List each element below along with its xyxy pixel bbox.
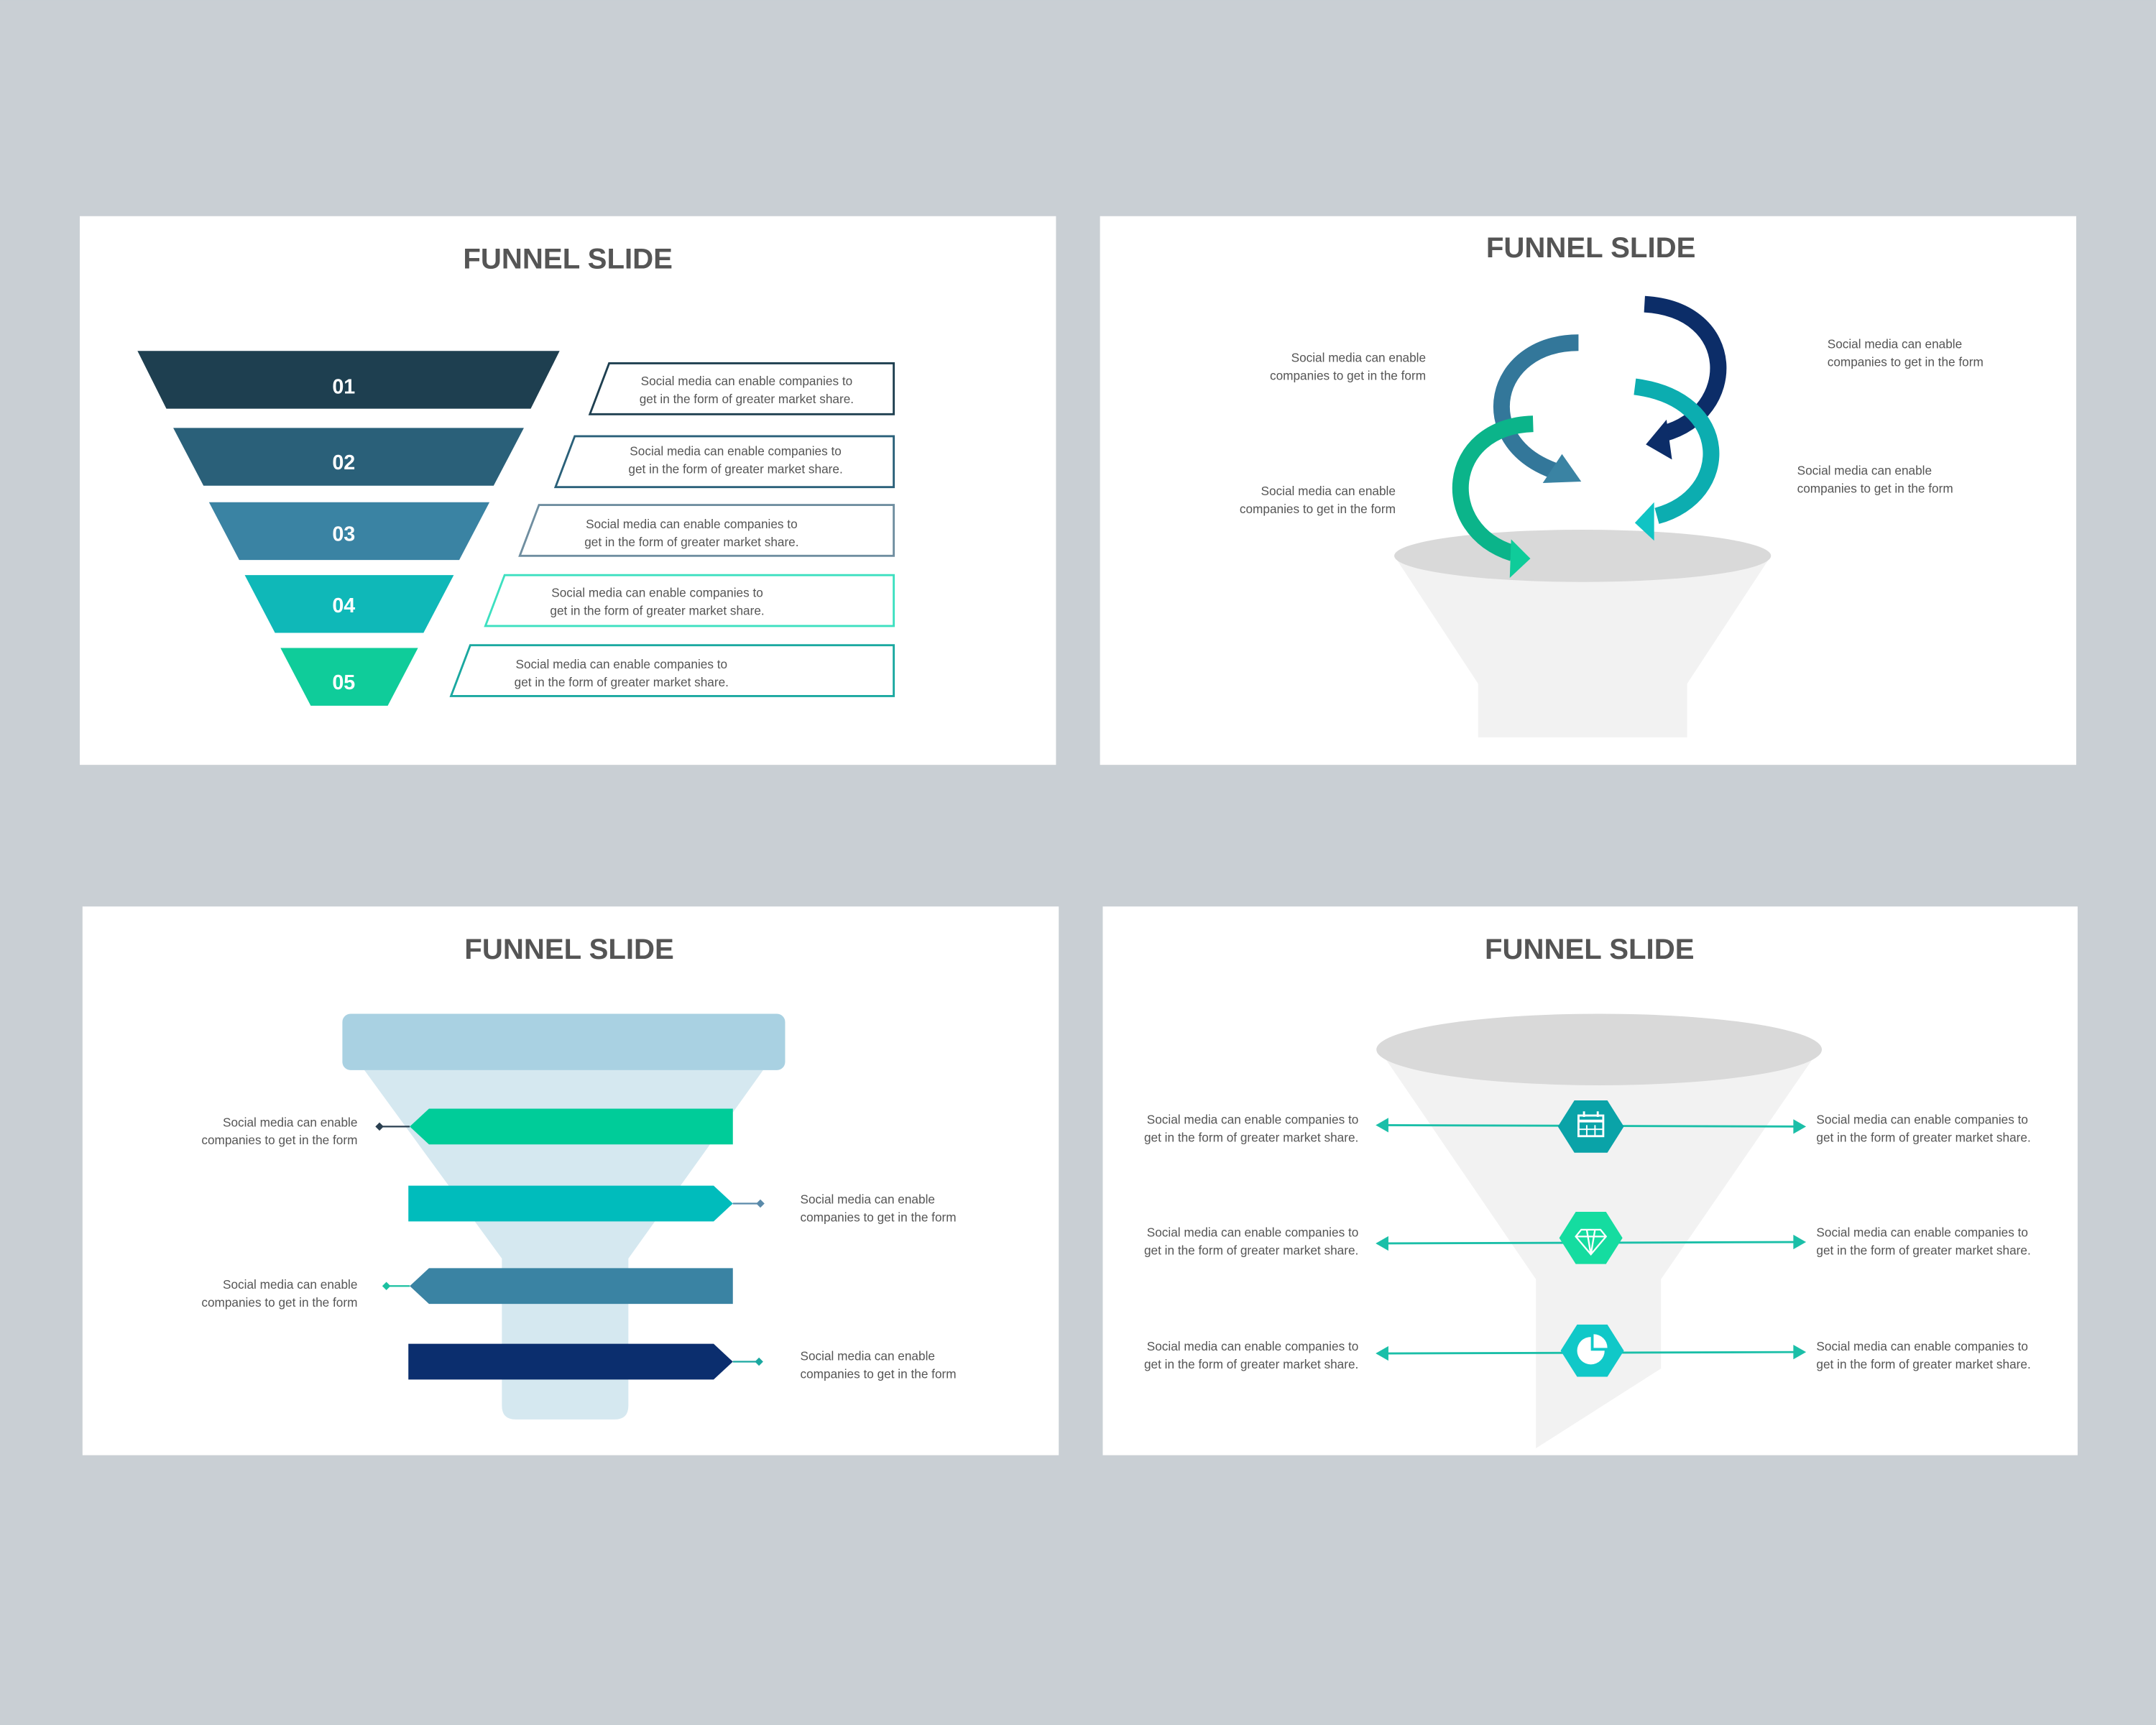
text: left 3: Social media can enable [223, 1277, 357, 1292]
icon: calendar hexagon [1558, 1100, 1624, 1153]
text box 1 [590, 363, 894, 414]
text: right 2: Social media can enable companies to [1816, 1225, 2028, 1239]
funnel layer 01: 01 [332, 376, 355, 399]
text: right 3: get in the form of greater market share. [1816, 1357, 2031, 1371]
text: right 4 [801, 1349, 957, 1381]
text box 4 [485, 575, 894, 626]
text: left 1: get in the form of greater market share. [1144, 1130, 1358, 1144]
funnel layer 03 [209, 502, 489, 560]
text: right top: companies to get in the form [1828, 354, 1984, 369]
text: left 1 [1144, 1113, 1358, 1144]
text: left 1: Social media can enable companies to [1147, 1113, 1358, 1127]
text: right 2 [1816, 1225, 2031, 1257]
bar 2 [408, 1186, 765, 1221]
icon: diamond hexagon [1560, 1212, 1623, 1264]
funnel layer 04 [245, 575, 453, 632]
funnel body [1394, 530, 1771, 737]
text box 2 [556, 436, 894, 487]
text: right 3 [1816, 1339, 2031, 1371]
text: right 2: get in the form of greater market share. [1816, 1243, 2031, 1257]
text: left 2 [1144, 1225, 1358, 1257]
text box 1: get in the form of greater market share. [640, 392, 854, 406]
text box 2: Social media can enable companies to [630, 444, 842, 459]
text: right 1: get in the form of greater market share. [1816, 1130, 2031, 1144]
text: left top [1270, 351, 1426, 382]
text: right top [1828, 336, 1984, 369]
title: FUNNEL SLIDE [1485, 933, 1695, 965]
icon: pie chart hexagon [1561, 1325, 1624, 1377]
panel: funnel layers [80, 216, 1056, 765]
funnel layer 02 [173, 428, 524, 486]
text box 5: Social media can enable companies to [516, 657, 727, 671]
text: left top: Social media can enable [1291, 351, 1426, 365]
funnel layer 04: 04 [332, 594, 355, 617]
text: right 4: Social media can enable [801, 1349, 935, 1363]
text box 3: get in the form of greater market share. [584, 535, 799, 549]
text box 4: get in the form of greater market share. [550, 604, 765, 618]
arrow: navy [1644, 304, 1718, 459]
text box 3: Social media can enable companies to [586, 517, 798, 531]
text: right 2 [801, 1192, 957, 1224]
text box 2: get in the form of greater market share. [628, 462, 843, 477]
text: left 2: Social media can enable companies to [1147, 1225, 1358, 1239]
text box 1: Social media can enable companies to [641, 374, 852, 388]
text: right 3: Social media can enable companies to [1816, 1339, 2028, 1353]
text: right top: Social media can enable [1828, 336, 1962, 351]
funnel layer 01 [137, 351, 560, 409]
panel: funnel with icons [1102, 906, 2078, 1455]
text: right middle: Social media can enable [1797, 463, 1932, 477]
arrow: green [1460, 424, 1533, 578]
text: left 1: companies to get in the form [201, 1133, 357, 1147]
bar 1 [375, 1108, 733, 1144]
funnel body [342, 1013, 785, 1420]
text: right 4: companies to get in the form [801, 1366, 957, 1381]
panel: funnel with arrows [1100, 216, 2076, 765]
arrow: steel blue [1501, 343, 1581, 483]
text box 4: Social media can enable companies to [551, 586, 763, 600]
text: left bottom: Social media can enable [1261, 484, 1396, 498]
text box 5: get in the form of greater market share. [515, 675, 729, 689]
panel: funnel with bars [83, 906, 1059, 1455]
text: left 3: companies to get in the form [201, 1295, 357, 1310]
title: FUNNEL SLIDE [463, 242, 673, 275]
text: right middle [1797, 463, 1953, 495]
text: right 2: companies to get in the form [801, 1210, 957, 1224]
funnel layer 02: 02 [332, 451, 355, 474]
title: FUNNEL SLIDE [1486, 231, 1695, 264]
text: left bottom: companies to get in the form [1240, 502, 1396, 516]
funnel layer 05 [280, 648, 418, 706]
text box 5 [451, 645, 894, 696]
text: left 3: Social media can enable companies to [1147, 1339, 1358, 1353]
text: right 2: Social media can enable [801, 1192, 935, 1206]
text: right 1: Social media can enable companies to [1816, 1113, 2028, 1127]
text: left 3 [1144, 1339, 1358, 1371]
text box 3 [520, 505, 894, 556]
arrow: teal [1635, 387, 1711, 540]
funnel layer 03: 03 [332, 523, 355, 546]
bar 3 [382, 1268, 733, 1304]
text: left bottom [1240, 484, 1396, 516]
funnel layer 05: 05 [332, 671, 355, 694]
text: left 1 [201, 1115, 357, 1147]
text: left 3: get in the form of greater market share. [1144, 1357, 1358, 1371]
funnel body [1376, 1013, 1822, 1448]
text: left 1: Social media can enable [223, 1115, 357, 1129]
text: left 3 [201, 1277, 357, 1310]
text: left 2: get in the form of greater market share. [1144, 1243, 1358, 1257]
bar 4 [408, 1344, 763, 1379]
title: FUNNEL SLIDE [464, 933, 674, 965]
text: right 1 [1816, 1113, 2031, 1144]
text: right middle: companies to get in the form [1797, 481, 1953, 495]
text: left top: companies to get in the form [1270, 368, 1426, 382]
connector lines [1378, 1120, 1804, 1359]
